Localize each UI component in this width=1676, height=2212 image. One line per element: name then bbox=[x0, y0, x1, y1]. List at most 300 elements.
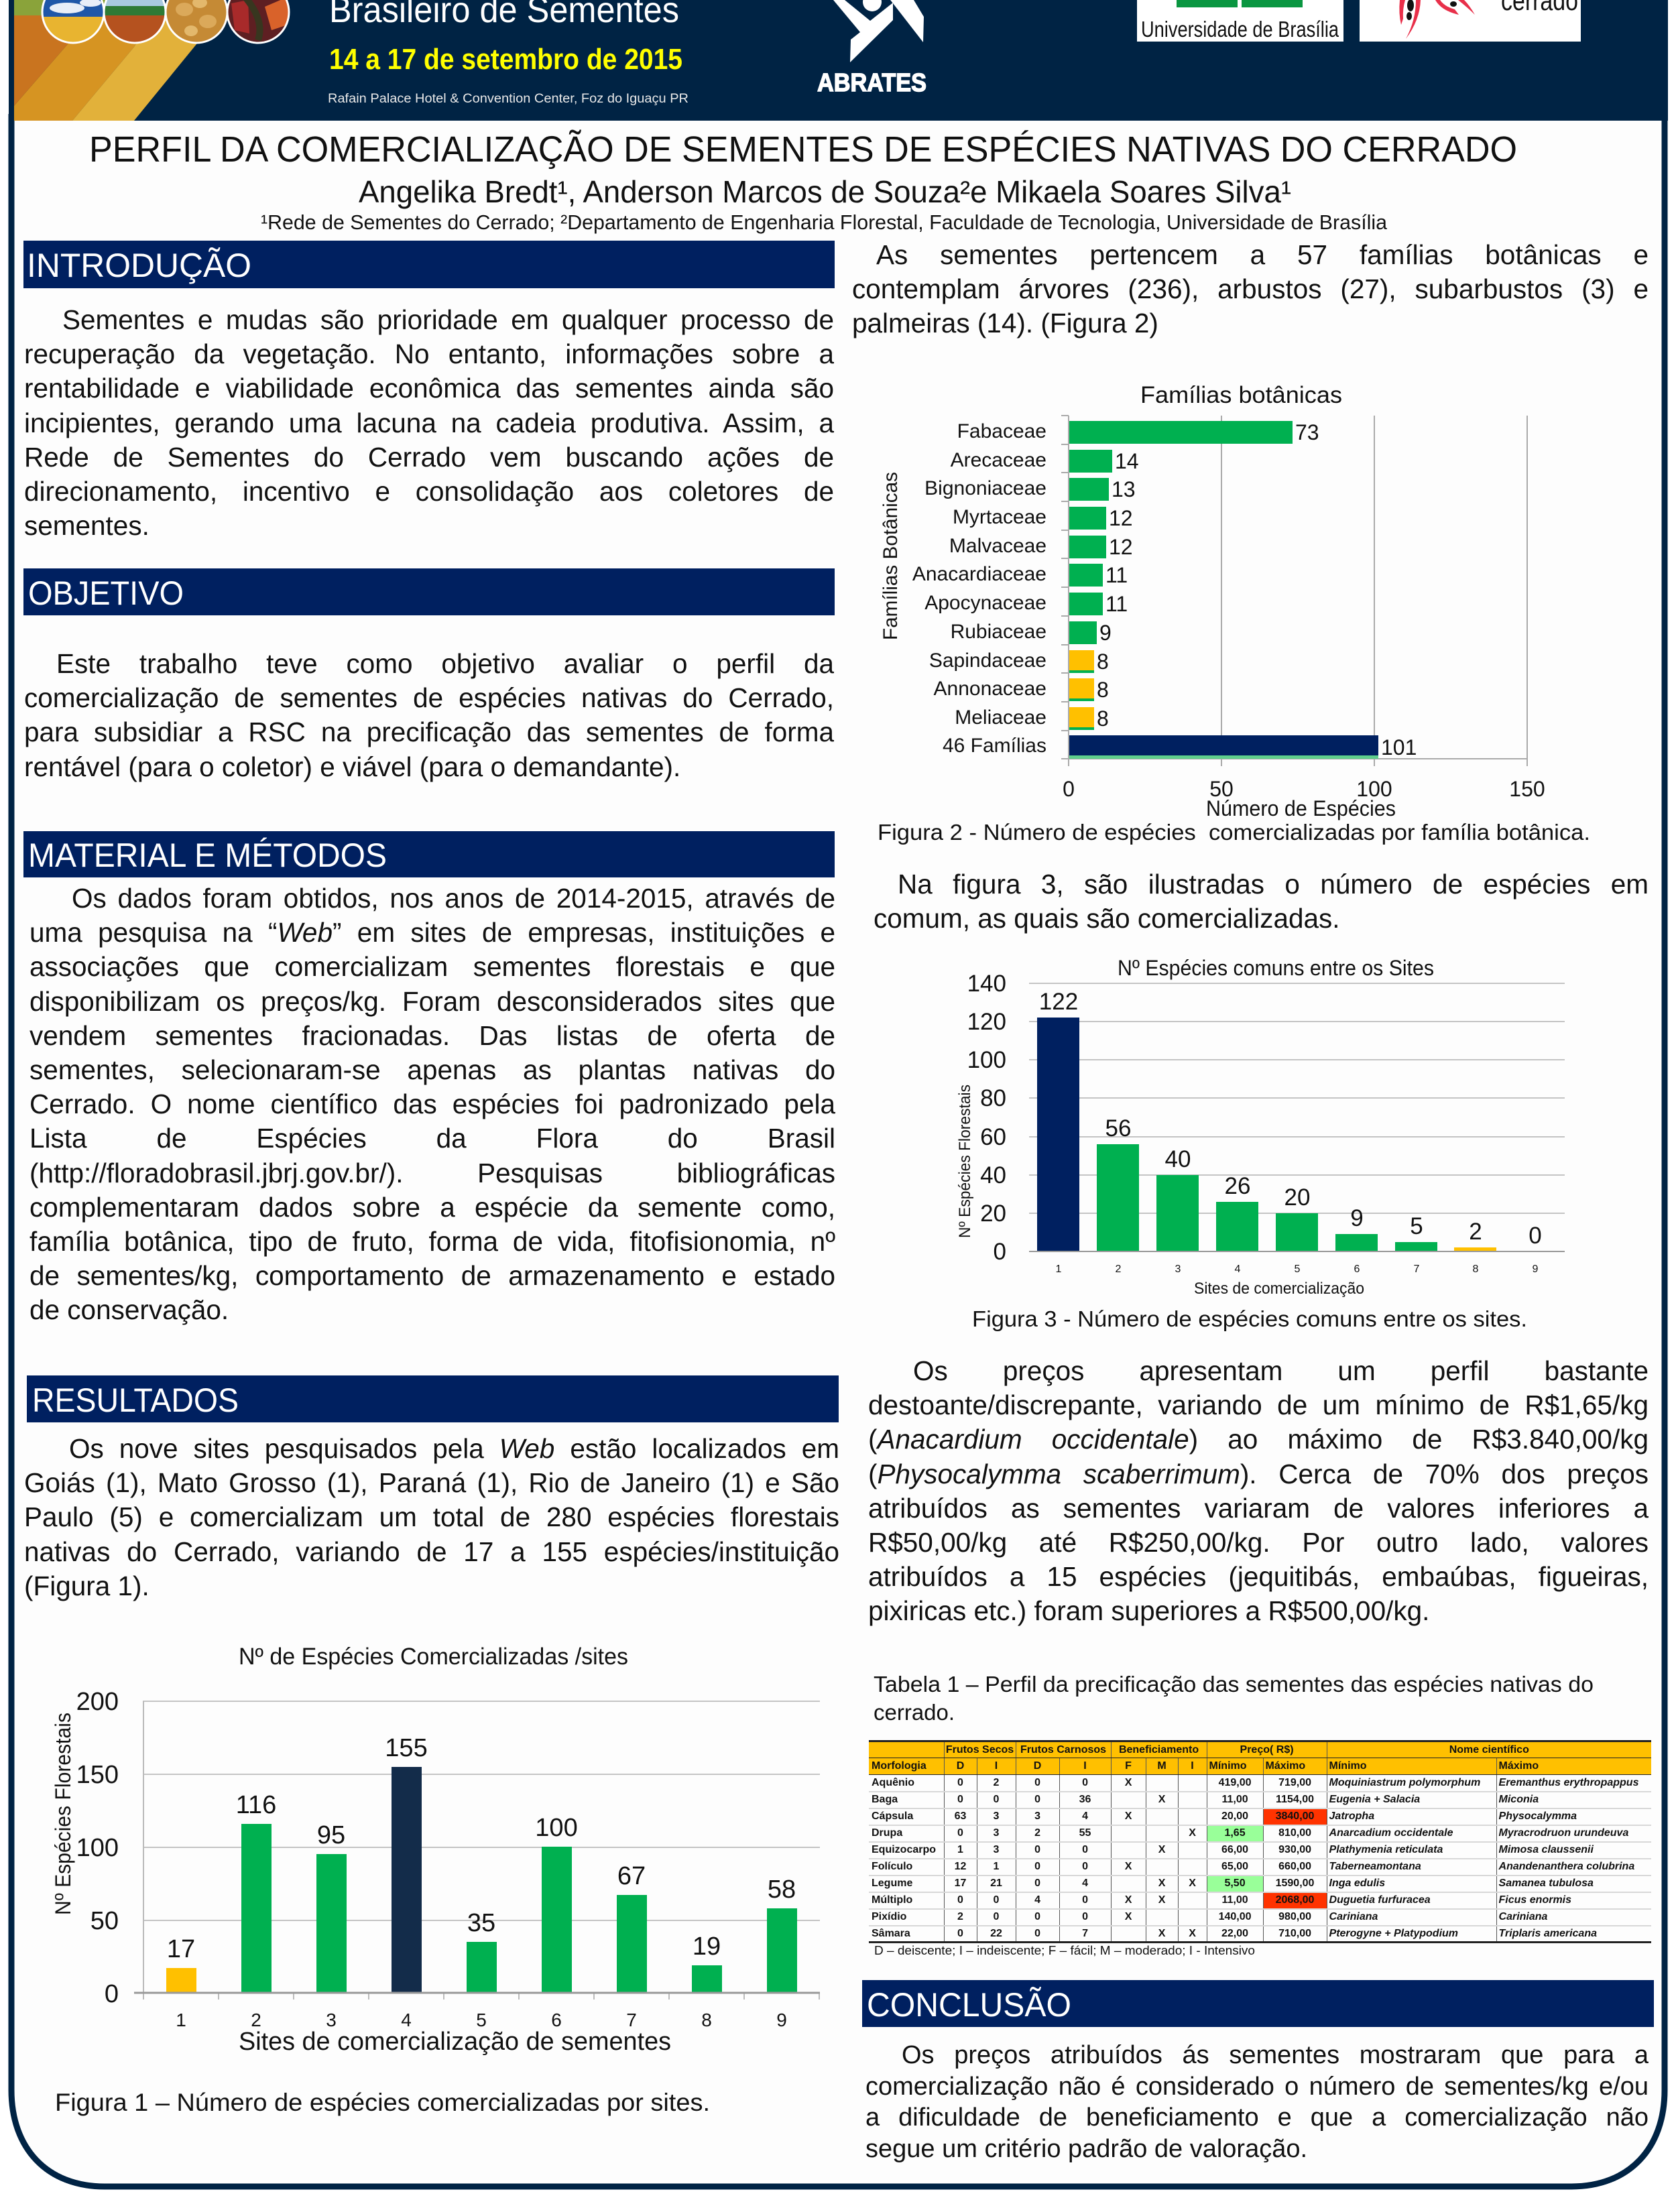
y axis labels: 50 bbox=[91, 1907, 119, 1935]
value labels: 122 bbox=[1039, 989, 1078, 1015]
table: precificação das sementes: Eugenia + Salacia bbox=[1329, 1794, 1420, 1805]
y axis labels: 120 bbox=[967, 1009, 1006, 1035]
text: material e métodos: sementes, selecionaram-se apenas as plantas nativas do bbox=[29, 1054, 835, 1085]
text: conclusão: segue um critério padrão de valoração. bbox=[865, 2135, 1307, 2163]
table: precificação das sementes: Mínimo bbox=[1209, 1760, 1247, 1772]
table: precificação das sementes: X bbox=[1158, 1794, 1165, 1805]
y axis title: Famílias Botânicas bbox=[880, 472, 902, 640]
text: preços: atribuídos as sementes variaram de valores inferiores a bbox=[868, 1493, 1649, 1524]
text: objetivo: Este trabalho teve como objetivo avaliar o perfil da bbox=[56, 648, 834, 679]
table: precificação das sementes: Duguetia furfuracea bbox=[1329, 1894, 1431, 1906]
text: objetivo bbox=[24, 648, 834, 782]
bar chart: figura 2 bbox=[880, 382, 1545, 820]
text: material e métodos: uma pesquisa na “Web” em sites de empresas, instituições e bbox=[29, 917, 835, 948]
text: preços: Os preços apresentam um perfil bastante bbox=[913, 1355, 1649, 1386]
category labels bbox=[912, 420, 1046, 757]
table: precificação das sementes: 5,50 bbox=[1224, 1878, 1246, 1889]
text: material e métodos: de sementes/kg, comportamento de armazenamento e estado bbox=[29, 1260, 835, 1291]
text: introdução: Sementes e mudas são prioridade em qualquer processo de bbox=[62, 304, 834, 335]
x axis labels: 4 bbox=[401, 2010, 412, 2030]
caption: figura 3: Figura 3 - Número de espécies comuns entre os sites. bbox=[972, 1306, 1527, 1331]
table: precificação das sementes: 7 bbox=[1082, 1928, 1088, 1939]
table: precificação das sementes: 719,00 bbox=[1278, 1777, 1311, 1788]
value labels: 95 bbox=[317, 1821, 345, 1849]
table: precificação das sementes: 1 bbox=[957, 1844, 963, 1855]
table: precificação das sementes: Mimosa claussenii bbox=[1499, 1844, 1594, 1855]
text: famílias botânicas bbox=[852, 239, 1649, 339]
value labels: 9 bbox=[1099, 621, 1112, 645]
x axis labels: 5 bbox=[1295, 1264, 1301, 1275]
value labels: 35 bbox=[467, 1909, 495, 1937]
value labels: 12 bbox=[1109, 535, 1133, 559]
table: precificação das sementes: 810,00 bbox=[1278, 1827, 1311, 1839]
table: precificação das sementes: 11,00 bbox=[1221, 1794, 1248, 1805]
text: preços: destoante/discrepante, variando de um mínimo de R$1,65/kg bbox=[868, 1390, 1649, 1420]
value labels: 101 bbox=[1381, 735, 1417, 759]
table: precificação das sementes: Múltiplo bbox=[872, 1894, 912, 1906]
x axis labels: 0 bbox=[1063, 777, 1075, 801]
logo: ABRATES bbox=[817, 0, 926, 97]
table: precificação das sementes: 140,00 bbox=[1219, 1911, 1251, 1922]
table: precificação das sementes: 65,00 bbox=[1221, 1861, 1248, 1872]
text: famílias botânicas: palmeiras (14). (Figura 2) bbox=[852, 308, 1158, 339]
table: precificação das sementes: Taberneamontana bbox=[1329, 1861, 1421, 1872]
chart title: Nº de Espécies Comercializadas /sites bbox=[239, 1644, 628, 1670]
table: precificação das sementes: Aquênio bbox=[872, 1777, 914, 1788]
caption: tabela 1: cerrado. bbox=[874, 1700, 955, 1725]
value labels: 8 bbox=[1097, 706, 1109, 731]
table: precificação das sementes: Ficus enormis bbox=[1499, 1894, 1571, 1906]
table: precificação das sementes: 3 bbox=[994, 1827, 999, 1839]
x axis labels: 7 bbox=[1414, 1264, 1420, 1275]
text: introdução: recuperação da vegetação. No entanto, informações sobre a bbox=[24, 339, 834, 369]
circular crop photographs bbox=[40, 0, 292, 47]
text: introdução: rentabilidade e viabilidade econômica das sementes ainda são bbox=[24, 373, 834, 404]
table: precificação das sementes: I bbox=[995, 1760, 998, 1772]
value labels: 11 bbox=[1105, 592, 1128, 616]
table: precificação das sementes: 12 bbox=[955, 1861, 966, 1872]
table: precificação das sementes: Pixídio bbox=[872, 1911, 906, 1922]
table: precificação das sementes: 11,00 bbox=[1221, 1894, 1248, 1906]
table: precificação das sementes: 0 bbox=[1082, 1777, 1088, 1788]
text: preços: atribuídos a 15 espécies (jequitibás, embaúbas, figueiras, bbox=[868, 1561, 1649, 1592]
text: resultados: Os nove sites pesquisados pela Web estão localizados em bbox=[69, 1433, 839, 1464]
value labels bbox=[1039, 989, 1542, 1249]
text: introdução: Rede de Sementes do Cerrado vem buscando ações de bbox=[24, 442, 834, 473]
table: precificação das sementes: X bbox=[1125, 1911, 1132, 1922]
table: precificação das sementes: 0 bbox=[957, 1928, 963, 1939]
text: material e métodos: vendem sementes fracionadas. Das listas de oferta de bbox=[29, 1020, 835, 1051]
text: material e métodos: Os dados foram obtidos, nos anos de 2014-2015, através de bbox=[72, 883, 835, 914]
x axis labels: 9 bbox=[1533, 1264, 1539, 1275]
table: precificação das sementes: 3 bbox=[994, 1810, 999, 1822]
x axis labels bbox=[1063, 777, 1545, 801]
x axis labels: 1 bbox=[1056, 1264, 1062, 1275]
bars bbox=[166, 1767, 797, 1993]
table: precificação das sementes: X bbox=[1158, 1844, 1165, 1855]
heading: conclusão bbox=[862, 1980, 1654, 2027]
text: introdução: sementes. bbox=[24, 510, 149, 541]
y axis labels: 100 bbox=[967, 1047, 1006, 1073]
x axis labels: 7 bbox=[626, 2010, 637, 2030]
table: precificação das sementes: 0 bbox=[994, 1894, 999, 1906]
table: precificação das sementes: 1,65 bbox=[1224, 1827, 1246, 1839]
text: resultados: Goiás (1), Mato Grosso (1), Paraná (1), Rio de Janeiro (1) e São bbox=[24, 1467, 839, 1498]
text: famílias botânicas: contemplam árvores (236), arbustos (27), subarbustos (3) e bbox=[852, 273, 1649, 304]
text: conclusão: comercialização não é considerado o número de sementes/kg e/ou bbox=[865, 2073, 1649, 2101]
table: precificação das sementes: Equizocarpo bbox=[872, 1844, 936, 1855]
text: objetivo: para subsidiar a RSC na precificação das sementes de forma bbox=[24, 717, 834, 747]
value labels: 26 bbox=[1225, 1173, 1250, 1199]
table: precificação das sementes: 0 bbox=[957, 1894, 963, 1906]
category labels: Apocynaceae bbox=[924, 592, 1046, 614]
x axis labels: 6 bbox=[1354, 1264, 1360, 1275]
x axis labels: 8 bbox=[701, 2010, 712, 2030]
value labels: 11 bbox=[1105, 563, 1128, 587]
category labels: Myrtaceae bbox=[953, 506, 1046, 528]
table: precificação das sementes: 3 bbox=[994, 1844, 999, 1855]
text: preços: (Anacardium occidentale) ao máximo de R$3.840,00/kg bbox=[868, 1424, 1649, 1455]
table: precificação das sementes: Cariniana bbox=[1499, 1911, 1547, 1922]
x axis labels: 8 bbox=[1473, 1264, 1479, 1275]
text: conclusão bbox=[865, 2041, 1649, 2163]
category labels: Fabaceae bbox=[957, 420, 1046, 442]
text: preços bbox=[868, 1355, 1649, 1626]
y axis title: Nº Espécies Florestais bbox=[956, 1085, 974, 1238]
bar chart: figura 1 bbox=[51, 1644, 820, 2056]
table: precificação das sementes: D bbox=[957, 1760, 964, 1772]
value labels: 8 bbox=[1097, 650, 1109, 674]
table: precificação das sementes: 4 bbox=[1082, 1810, 1088, 1822]
table: precificação das sementes: 980,00 bbox=[1278, 1911, 1311, 1922]
x axis labels: 3 bbox=[1175, 1264, 1181, 1275]
text: preços: pixiricas etc.) foram superiores a R$500,00/kg. bbox=[868, 1595, 1429, 1626]
x axis labels bbox=[176, 2010, 787, 2030]
value labels: 12 bbox=[1109, 506, 1133, 530]
table: precificação das sementes: D bbox=[1034, 1760, 1041, 1772]
x axis labels: 100 bbox=[1356, 777, 1392, 801]
value labels: 2 bbox=[1469, 1219, 1482, 1245]
y axis labels: 60 bbox=[980, 1124, 1006, 1150]
y axis labels: 200 bbox=[76, 1688, 119, 1716]
table: precificação das sementes: Anarcadium occidentale bbox=[1329, 1827, 1453, 1839]
table: precificação das sementes: 66,00 bbox=[1221, 1844, 1248, 1855]
table: precificação das sementes: 0 bbox=[994, 1794, 999, 1805]
table: precificação das sementes: Miconia bbox=[1499, 1794, 1539, 1805]
x axis labels: 9 bbox=[776, 2010, 787, 2030]
table: precificação das sementes: Anandenanthera colubrina bbox=[1499, 1861, 1634, 1872]
table: precificação das sementes: Moquiniastrum polymorphum bbox=[1329, 1777, 1480, 1788]
text: material e métodos: associações que comercializam sementes florestais e que bbox=[29, 951, 835, 982]
x axis labels: 5 bbox=[476, 2010, 487, 2030]
affiliations: ¹Rede de Sementes do Cerrado; ²Departamento de Engenharia Florestal, Faculdade de Tecnologia, Universidade de Brasília bbox=[261, 210, 1388, 234]
heading: resultados bbox=[27, 1375, 839, 1422]
text: introdução bbox=[24, 304, 834, 541]
table: precificação das sementes: 0 bbox=[1034, 1777, 1040, 1788]
table: precificação das sementes: X bbox=[1125, 1861, 1132, 1872]
x axis labels: 1 bbox=[176, 2010, 186, 2030]
value labels: 19 bbox=[693, 1932, 721, 1961]
x axis labels bbox=[1056, 1264, 1539, 1275]
table: precificação das sementes: 0 bbox=[1082, 1911, 1088, 1922]
logo: Rede de Sementes do Cerrado bbox=[1360, 0, 1581, 42]
table: precificação das sementes: X bbox=[1158, 1878, 1165, 1889]
x axis labels: 4 bbox=[1235, 1264, 1241, 1275]
category labels: Meliaceae bbox=[955, 706, 1046, 729]
header colour bands bbox=[14, 0, 221, 121]
authors: Angelika Bredt¹, Anderson Marcos de Souza²e Mikaela Soares Silva¹ bbox=[359, 174, 1291, 209]
table: precificação das sementes: 0 bbox=[957, 1794, 963, 1805]
table: precificação das sementes: Beneficiamento bbox=[1119, 1744, 1199, 1755]
table: precificação das sementes: 1154,00 bbox=[1276, 1794, 1314, 1805]
table: precificação das sementes: Preço( R$) bbox=[1240, 1744, 1294, 1755]
bars bbox=[1037, 1018, 1496, 1251]
text: material e métodos: disponibilizam os preços/kg. Foram desconsiderados sites que bbox=[29, 986, 835, 1017]
table: precificação das sementes: 17 bbox=[955, 1878, 966, 1889]
table: precificação das sementes: 2 bbox=[1034, 1827, 1040, 1839]
table: precificação das sementes: F bbox=[1125, 1760, 1132, 1772]
text: figura 3 introduction: comum, as quais são comercializadas. bbox=[874, 903, 1340, 934]
table: precificação das sementes: Folículo bbox=[872, 1861, 912, 1872]
x axis labels: 3 bbox=[326, 2010, 337, 2030]
table: precificação das sementes: 1 bbox=[994, 1861, 999, 1872]
table: precificação das sementes: Cariniana bbox=[1329, 1911, 1378, 1922]
title: PERFIL DA COMERCIALIZAÇÃO DE SEMENTES DE ESPÉCIES NATIVAS DO CERRADO bbox=[89, 129, 1517, 170]
table: precificação das sementes: 36 bbox=[1079, 1794, 1091, 1805]
table: precificação das sementes: Physocalymma bbox=[1499, 1810, 1577, 1822]
value labels: 20 bbox=[1284, 1184, 1310, 1211]
heading: objetivo: OBJETIVO bbox=[28, 574, 184, 612]
table: precificação das sementes: 0 bbox=[957, 1827, 963, 1839]
x axis title: Sites de comercialização de sementes bbox=[239, 2028, 671, 2056]
table: precificação das sementes bbox=[869, 1740, 1651, 1943]
table: precificação das sementes: X bbox=[1125, 1894, 1132, 1906]
table: precificação das sementes: Nome científico bbox=[1449, 1744, 1529, 1755]
table: precificação das sementes: 930,00 bbox=[1278, 1844, 1311, 1855]
text: famílias botânicas: As sementes pertencem a 57 famílias botânicas e bbox=[876, 239, 1649, 270]
y axis title: Nº Espécies Florestais bbox=[51, 1713, 75, 1915]
table: precificação das sementes: 0 bbox=[1082, 1894, 1088, 1906]
text: resultados: nativas do Cerrado, variando de 17 a 155 espécies/instituição bbox=[24, 1536, 839, 1567]
heading: resultados: RESULTADOS bbox=[32, 1381, 239, 1419]
table: precificação das sementes: M bbox=[1157, 1760, 1166, 1772]
text: material e métodos: complementaram dados sobre a espécie da semente como, bbox=[29, 1192, 835, 1223]
table: precificação das sementes: X bbox=[1189, 1878, 1196, 1889]
x axis labels: 150 bbox=[1509, 777, 1545, 801]
text: material e métodos: Lista de Espécies da Flora do Brasil bbox=[29, 1123, 835, 1154]
table: precificação das sementes: Drupa bbox=[872, 1827, 902, 1839]
value labels: 13 bbox=[1112, 477, 1136, 501]
value labels: 73 bbox=[1295, 420, 1319, 444]
table: precificação das sementes: 2 bbox=[994, 1777, 999, 1788]
table: precificação das sementes: Pterogyne + Platypodium bbox=[1329, 1928, 1458, 1939]
text: material e métodos: Cerrado. O nome científico das espécies foi padronizado pela bbox=[29, 1089, 835, 1119]
value labels: 67 bbox=[617, 1862, 646, 1890]
x axis labels: 2 bbox=[251, 2010, 261, 2030]
category labels: 46 Famílias bbox=[943, 735, 1046, 757]
table: precificação das sementes: 21 bbox=[990, 1878, 1002, 1889]
y axis labels bbox=[76, 1688, 119, 2008]
category labels: Anacardiaceae bbox=[912, 563, 1046, 585]
caption: figura 1: Figura 1 – Número de espécies comercializadas por sites. bbox=[55, 2089, 710, 2116]
table: precificação das sementes: 1590,00 bbox=[1276, 1878, 1314, 1889]
table: precificação das sementes: X bbox=[1158, 1928, 1165, 1939]
table: precificação das sementes: 2 bbox=[957, 1911, 963, 1922]
table: precificação das sementes: Samanea tubulosa bbox=[1499, 1878, 1594, 1889]
caption: tabela 1: Tabela 1 – Perfil da precificação das sementes das espécies nativas do bbox=[874, 1672, 1594, 1697]
text: objetivo: rentável (para o coletor) e viável (para o demandante). bbox=[24, 751, 680, 782]
table: precificação das sementes: 660,00 bbox=[1278, 1861, 1311, 1872]
heading: objetivo bbox=[23, 568, 835, 615]
table: precificação das sementes: I bbox=[1191, 1760, 1194, 1772]
event dates: 14 a 17 de setembro de 2015 bbox=[329, 43, 682, 76]
table: precificação das sementes: X bbox=[1189, 1827, 1196, 1839]
category labels: Annonaceae bbox=[933, 678, 1046, 700]
text: figura 3 introduction: Na figura 3, são ilustradas o número de espécies em bbox=[898, 869, 1649, 900]
table: precificação das sementes: 0 bbox=[1082, 1844, 1088, 1855]
text: material e métodos bbox=[29, 883, 835, 1325]
text: objetivo: comercialização de sementes de espécies nativas do Cerrado, bbox=[24, 682, 834, 713]
text: material e métodos: família botânica, tipo de fruto, forma de vida, fitofisionomia, nº bbox=[29, 1226, 835, 1257]
table: precificação das sementes: 3 bbox=[1034, 1810, 1040, 1822]
category labels: Rubiaceae bbox=[951, 621, 1046, 643]
event venue: Rafain Palace Hotel & Convention Center, Foz do Iguaçu PR bbox=[328, 92, 689, 106]
table: precificação das sementes: 4 bbox=[1082, 1878, 1088, 1889]
table: precificação das sementes: 419,00 bbox=[1219, 1777, 1251, 1788]
value labels: 5 bbox=[1410, 1213, 1423, 1239]
y axis labels bbox=[967, 971, 1006, 1265]
text: resultados: (Figura 1). bbox=[24, 1571, 149, 1601]
table: precificação das sementes: 22,00 bbox=[1221, 1928, 1248, 1939]
table: precificação das sementes: X bbox=[1158, 1894, 1165, 1906]
text: resultados bbox=[24, 1433, 839, 1601]
heading: material e métodos: MATERIAL E MÉTODOS bbox=[28, 837, 387, 874]
text: resultados: Paulo (5) e comercializam um total de 280 espécies florestais bbox=[24, 1501, 839, 1532]
y axis labels: 100 bbox=[76, 1834, 119, 1862]
value labels: 14 bbox=[1115, 449, 1139, 473]
y axis labels: 20 bbox=[980, 1201, 1006, 1227]
table: precificação das sementes: 4 bbox=[1034, 1894, 1040, 1906]
value labels: 58 bbox=[768, 1876, 796, 1904]
chart title: Famílias botânicas bbox=[1140, 382, 1342, 408]
table: precificação das sementes: Myracrodruon urundeuva bbox=[1499, 1827, 1628, 1839]
caption: figura 2: Figura 2 - Número de espécies comercializadas por família botânica. bbox=[878, 820, 1590, 845]
text: figura 3 introduction bbox=[874, 869, 1649, 934]
value labels: 9 bbox=[1350, 1205, 1364, 1231]
heading: introdução: INTRODUÇÃO bbox=[27, 247, 251, 284]
table: precificação das sementes: 0 bbox=[1034, 1928, 1040, 1939]
value labels: 0 bbox=[1529, 1223, 1542, 1249]
y axis labels: 40 bbox=[980, 1162, 1006, 1188]
table: precificação das sementes: X bbox=[1125, 1777, 1132, 1788]
chart title: Nº Espécies comuns entre os Sites bbox=[1118, 956, 1434, 980]
table: precificação das sementes: 0 bbox=[1082, 1861, 1088, 1872]
table: precificação das sementes: Mínimo bbox=[1329, 1760, 1367, 1772]
table: precificação das sementes: Plathymenia reticulata bbox=[1329, 1844, 1443, 1855]
value labels bbox=[1097, 420, 1417, 759]
table: precificação das sementes: 0 bbox=[1034, 1911, 1040, 1922]
text: material e métodos: (http://floradobrasil.jbrj.gov.br/). Pesquisas bibliográficas bbox=[29, 1157, 835, 1188]
y axis labels: 0 bbox=[994, 1239, 1006, 1265]
caption: tabela 1 bbox=[874, 1672, 1594, 1725]
logo: Universidade de Brasília: Universidade de Brasília bbox=[1141, 17, 1339, 42]
category labels: Bignoniaceae bbox=[924, 477, 1046, 499]
table: precificação das sementes: Inga edulis bbox=[1329, 1878, 1385, 1889]
table legend: D – deiscente; I – indeiscente; F – fácil; M – moderado; I - Intensivo bbox=[874, 1944, 1255, 1957]
table: precificação das sementes: Baga bbox=[872, 1794, 898, 1805]
table: precificação das sementes: 0 bbox=[994, 1911, 999, 1922]
table: precificação das sementes: Frutos Carnosos bbox=[1020, 1744, 1106, 1755]
table: precificação das sementes: Eremanthus erythropappus bbox=[1499, 1777, 1638, 1788]
x axis labels: 50 bbox=[1209, 777, 1234, 801]
table: precificação das sementes: 20,00 bbox=[1221, 1810, 1248, 1822]
text: conclusão: a dificuldade de beneficiamento e que a comercialização não bbox=[865, 2103, 1649, 2132]
table: precificação das sementes: Triplaris americana bbox=[1499, 1928, 1597, 1939]
x axis title: Número de Espécies bbox=[1206, 796, 1396, 820]
value labels bbox=[167, 1734, 796, 1963]
text: preços: (Physocalymma scaberrimum). Cerca de 70% dos preços bbox=[868, 1459, 1649, 1489]
table: precificação das sementes: 55 bbox=[1079, 1827, 1091, 1839]
text: preços: R$50,00/kg até R$250,00/kg. Por outro lado, valores bbox=[868, 1527, 1649, 1558]
table: precificação das sementes: Cápsula bbox=[872, 1810, 913, 1822]
value labels: 100 bbox=[535, 1814, 578, 1842]
bar chart: figura 3 bbox=[956, 956, 1565, 1298]
header background bbox=[9, 0, 1668, 121]
table: precificação das sementes: 63 bbox=[955, 1810, 966, 1822]
heading: conclusão: CONCLUSÃO bbox=[867, 1986, 1071, 2024]
table: precificação das sementes: 710,00 bbox=[1278, 1928, 1311, 1939]
text: conclusão: Os preços atribuídos ás sementes mostraram que para a bbox=[902, 2041, 1649, 2069]
table: precificação das sementes: Máximo bbox=[1266, 1760, 1305, 1772]
y axis labels: 0 bbox=[105, 1980, 119, 2008]
table: precificação das sementes: Máximo bbox=[1499, 1760, 1539, 1772]
table: precificação das sementes: 3840,00 bbox=[1276, 1810, 1314, 1822]
table: precificação das sementes: I bbox=[1083, 1760, 1087, 1772]
x axis labels: 2 bbox=[1116, 1264, 1122, 1275]
bars bbox=[1069, 421, 1378, 759]
table: precificação das sementes: X bbox=[1125, 1810, 1132, 1822]
value labels: 8 bbox=[1097, 678, 1109, 702]
table: precificação das sementes: Legume bbox=[872, 1878, 912, 1889]
table: precificação das sementes: 0 bbox=[957, 1777, 963, 1788]
table: precificação das sementes: 0 bbox=[1034, 1794, 1040, 1805]
table: precificação das sementes: Jatropha bbox=[1329, 1810, 1374, 1822]
category labels: Arecaceae bbox=[951, 449, 1046, 471]
table: precificação das sementes: Sâmara bbox=[872, 1928, 910, 1939]
value labels: 155 bbox=[385, 1734, 428, 1762]
table: precificação das sementes: X bbox=[1189, 1928, 1196, 1939]
heading: introdução bbox=[23, 241, 835, 288]
y axis labels: 150 bbox=[76, 1761, 119, 1789]
table: precificação das sementes: 22 bbox=[990, 1928, 1002, 1939]
x axis title: Sites de comercialização bbox=[1194, 1280, 1364, 1298]
table: precificação das sementes: 0 bbox=[1034, 1861, 1040, 1872]
logo: ABRATES: ABRATES bbox=[817, 69, 926, 97]
x axis labels: 6 bbox=[551, 2010, 562, 2030]
table: precificação das sementes: Morfologia bbox=[872, 1760, 926, 1772]
value labels: 40 bbox=[1165, 1146, 1191, 1172]
value labels: 116 bbox=[236, 1791, 276, 1819]
table: precificação das sementes: 2068,00 bbox=[1276, 1894, 1314, 1906]
text: introdução: direcionamento, incentivo e consolidação aos coletores de bbox=[24, 476, 834, 507]
table: precificação das sementes: Frutos Secos bbox=[946, 1744, 1014, 1755]
text: material e métodos: de conservação. bbox=[29, 1294, 229, 1325]
value labels: 56 bbox=[1105, 1115, 1131, 1142]
logo: Universidade de Brasília bbox=[1137, 0, 1343, 42]
table: precificação das sementes: 0 bbox=[1034, 1844, 1040, 1855]
category labels: Malvaceae bbox=[949, 535, 1046, 557]
y axis labels: 80 bbox=[980, 1085, 1006, 1111]
